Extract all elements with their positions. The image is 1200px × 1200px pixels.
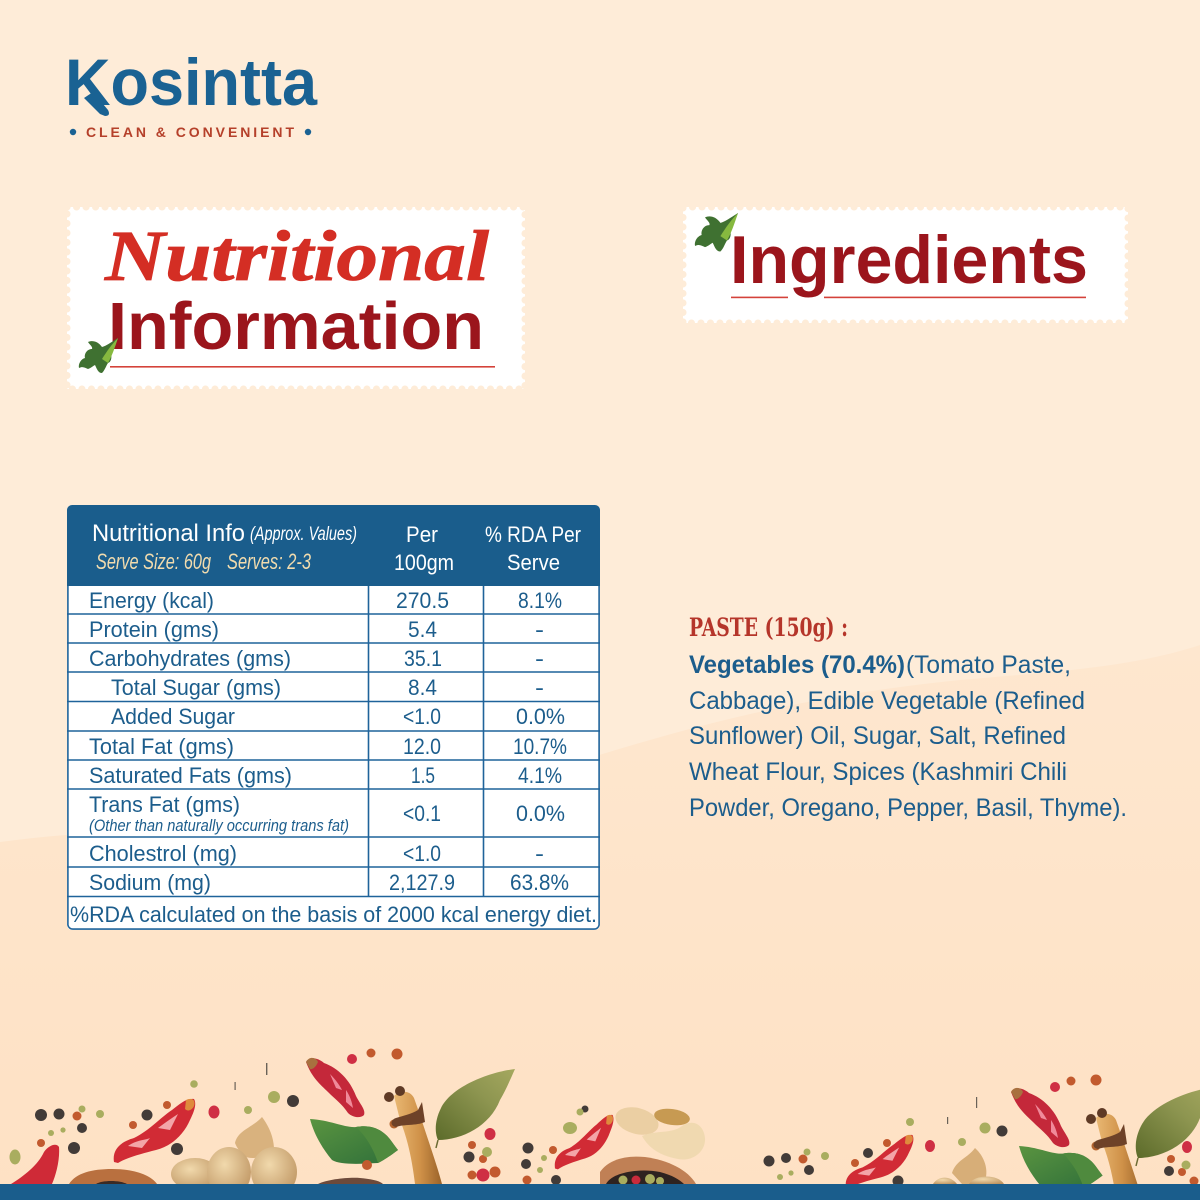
ingredients text: Cabbage), Edible Vegetable (Refined — [689, 687, 1085, 715]
row: cholestrol: - — [535, 841, 544, 866]
row: carbohydrates: 35.1 — [404, 646, 442, 671]
row: energy: 8.1% — [518, 588, 562, 613]
row: added sugar — [111, 704, 565, 729]
icon: cinnamon stick with clove — [384, 1086, 1144, 1200]
row: cholestrol — [89, 841, 544, 866]
row: protein: Protein (gms) — [89, 617, 219, 642]
table header: % RDA Per — [485, 522, 581, 547]
text block: ingredients list — [689, 613, 1127, 822]
row: total sugar — [111, 675, 544, 700]
row: cholestrol: Cholestrol (mg) — [89, 841, 237, 866]
row: trans fat — [89, 792, 565, 835]
icon: shell nuts right — [933, 1148, 1004, 1184]
logo — [65, 45, 318, 140]
table header: 100gm — [394, 550, 454, 575]
row: total fat: 10.7% — [513, 734, 567, 759]
row: energy: 270.5 — [396, 588, 449, 613]
table grid — [67, 586, 600, 929]
row: total sugar: Total Sugar (gms) — [111, 675, 281, 700]
footer bar — [0, 1184, 1200, 1200]
ingredients text: Powder, Oregano, Pepper, Basil, Thyme). — [689, 794, 1127, 822]
table header: (Approx. Values) — [250, 524, 357, 545]
row: added sugar: 0.0% — [516, 704, 565, 729]
ingredients text: Wheat Flour, Spices (Kashmiri Chili — [689, 758, 1067, 786]
row: energy — [89, 588, 562, 613]
ingredients text: Sunflower) Oil, Sugar, Salt, Refined — [689, 722, 1066, 750]
row: trans fat: (Other than naturally occurring trans fat) — [89, 817, 349, 835]
icon: wooden bowls — [69, 1157, 696, 1185]
row: trans fat: <0.1 — [403, 801, 441, 826]
table header: Per — [406, 522, 438, 547]
row: sodium: 63.8% — [510, 870, 569, 895]
table header: Serve Size: 60g — [96, 549, 212, 574]
illustration: spices border — [10, 1048, 1200, 1200]
icon: parsley leaf — [695, 213, 738, 252]
table footnote: %RDA calculated on the basis of 2000 kcal energy diet. — [70, 902, 597, 927]
row: saturated fats: 4.1% — [518, 763, 562, 788]
row: carbohydrates: Carbohydrates (gms) — [89, 646, 291, 671]
icon: parsley leaf — [79, 338, 118, 373]
row: saturated fats — [89, 763, 562, 788]
icon: green leaves — [310, 1119, 1103, 1189]
heading: Information: Information — [108, 289, 484, 364]
row: carbohydrates — [89, 646, 544, 671]
panel: nutrition table — [67, 505, 600, 930]
row: added sugar: Added Sugar — [111, 704, 235, 729]
underline — [731, 297, 1086, 298]
row: protein — [89, 617, 544, 642]
row: total fat: Total Fat (gms) — [89, 734, 234, 759]
paste heading: PASTE (150g) : — [689, 613, 848, 642]
tagline: CLEAN & CONVENIENT — [86, 124, 297, 140]
row: total fat — [89, 734, 567, 759]
icon: bay leaves — [436, 1069, 1200, 1166]
row: protein: 5.4 — [408, 617, 437, 642]
table header: Serves: 2-3 — [227, 549, 312, 574]
row: energy: Energy (kcal) — [89, 588, 214, 613]
row: cholestrol: <1.0 — [403, 841, 441, 866]
underline — [110, 366, 495, 368]
heading: Ingredients: Ingredients — [730, 222, 1088, 298]
row: trans fat: 0.0% — [516, 801, 565, 826]
ingredients text: Vegetables (70.4%) — [689, 651, 905, 679]
icon: nutmeg nuts left — [171, 1117, 297, 1197]
icon: peppercorns — [10, 1048, 1198, 1186]
table header: Serve — [507, 550, 560, 575]
ingredients text: (Tomato Paste, — [906, 651, 1071, 679]
row: total sugar: 8.4 — [408, 675, 437, 700]
brand name: Kosintta — [65, 45, 318, 119]
heading: Nutritional: Nutritional — [104, 216, 489, 296]
row: sodium: Sodium (mg) — [89, 870, 211, 895]
row: sodium: 2,127.9 — [389, 870, 455, 895]
row: total fat: 12.0 — [403, 734, 441, 759]
panel: nutritional information heading — [67, 207, 525, 389]
row: trans fat: Trans Fat (gms) — [89, 792, 240, 817]
panel: ingredients heading — [683, 207, 1128, 323]
icon: red chilies — [11, 1058, 1069, 1188]
row: added sugar: <1.0 — [403, 704, 441, 729]
row: sodium — [89, 870, 569, 895]
row: protein: - — [535, 617, 544, 642]
ingredients text — [689, 651, 1127, 822]
table header — [67, 505, 600, 586]
row: saturated fats: Saturated Fats (gms) — [89, 763, 292, 788]
row: carbohydrates: - — [535, 646, 544, 671]
icon: shell nuts center — [612, 1103, 705, 1160]
row: total sugar: - — [535, 675, 544, 700]
row: saturated fats: 1.5 — [411, 763, 435, 788]
table header: Nutritional Info — [92, 520, 245, 547]
